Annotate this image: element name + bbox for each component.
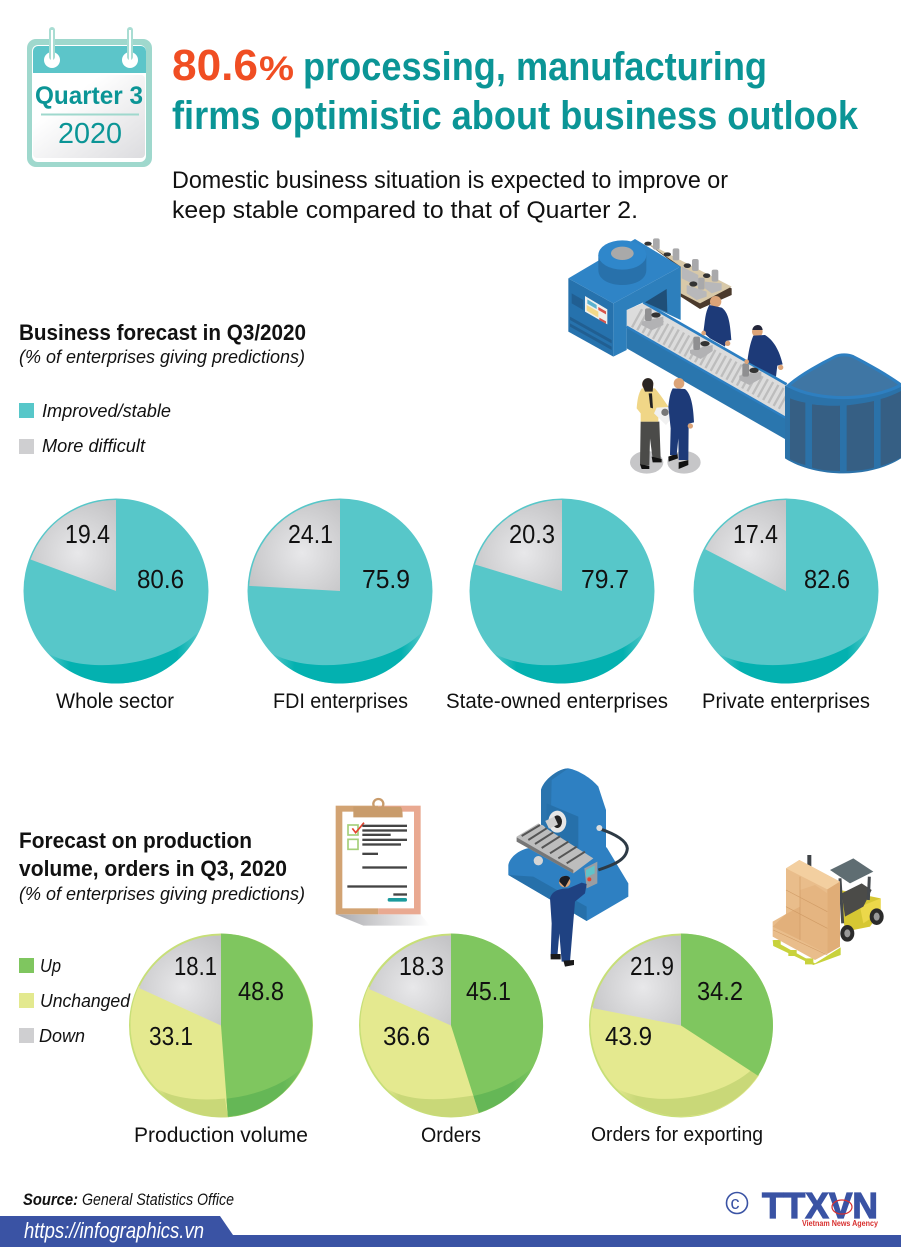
subtitle: [172, 167, 728, 224]
legend: business forecast: More difficult: [42, 436, 146, 456]
pie chart: production volume: 48.8: [238, 976, 284, 1006]
pie chart: orders: [359, 933, 543, 1147]
pie chart: private enterprises: Private enterprises: [702, 690, 870, 713]
pie chart: orders: 45.1: [466, 976, 511, 1006]
title: [172, 41, 859, 138]
source: [23, 1190, 234, 1209]
legend: business forecast: Improved/stable: [42, 401, 171, 421]
legend: business forecast: [19, 401, 171, 456]
pie chart: orders for exporting: 43.9: [605, 1021, 652, 1051]
icon: milling machine with operator: [508, 768, 628, 967]
pie chart: orders for exporting: [589, 934, 773, 1146]
pie chart: private enterprises: 17.4: [733, 519, 778, 549]
pie chart: private enterprises: [694, 498, 878, 713]
engineers discussing: [630, 378, 701, 474]
machine housing: [568, 239, 681, 357]
note: unit of measure: (% of enterprises giving predictions): [19, 884, 305, 904]
icon: calendar Quarter 3 2020: [27, 27, 152, 167]
pie chart: whole sector: 19.4: [65, 519, 110, 549]
note: unit of measure: (% of enterprises giving predictions): [19, 347, 305, 367]
pie chart: state-owned enterprises: 20.3: [509, 519, 555, 549]
heading: production forecast: [19, 828, 287, 881]
pie chart: production volume: 18.1: [174, 951, 217, 981]
pie chart: whole sector: 80.6: [137, 564, 184, 594]
pie chart: orders for exporting: Orders for exporting: [591, 1124, 763, 1146]
title: 80.6: [172, 41, 258, 90]
pie chart: orders: Orders: [421, 1124, 481, 1147]
pie chart: private enterprises: 82.6: [804, 564, 850, 594]
pie chart: orders: 18.3: [399, 951, 444, 981]
icon: forklift with boxes: [773, 855, 884, 965]
pie chart: state-owned enterprises: 79.7: [581, 564, 629, 594]
legend: production forecast: Up: [40, 956, 61, 976]
pie chart: whole sector: [24, 498, 208, 713]
footer banner: https://infographics.vn: [24, 1218, 204, 1243]
subtitle: Domestic business situation is expected to improve or: [172, 167, 728, 194]
conveyor belt: [627, 302, 787, 440]
pie chart: FDI enterprises: 75.9: [362, 564, 410, 594]
parts tray: [644, 238, 732, 309]
pie chart: production volume: 33.1: [149, 1021, 193, 1051]
illustration: factory conveyor with workers: [568, 238, 901, 474]
logo: TTXVN: TTXVN: [762, 1185, 878, 1226]
icon: clipboard checklist: [336, 799, 430, 926]
title: %: [259, 50, 294, 88]
hopper: [785, 355, 901, 473]
pie chart: whole sector: Whole sector: [56, 690, 174, 713]
worker: right at conveyor: [744, 325, 783, 377]
subtitle: keep stable compared to that of Quarter 2.: [172, 197, 638, 224]
pie chart: production volume: Production volume: [134, 1124, 308, 1147]
pie chart: orders: 36.6: [383, 1021, 430, 1051]
logo: TTXVN: c: [730, 1193, 740, 1213]
worker: left at conveyor: [701, 296, 731, 347]
footer banner: [0, 1216, 901, 1247]
pie chart: FDI enterprises: 24.1: [288, 519, 333, 549]
pie chart: state-owned enterprises: State-owned enterprises: [446, 690, 668, 713]
heading: production forecast: volume, orders in Q3, 2020: [19, 856, 287, 881]
icon: calendar Quarter 3 2020: Quarter 3: [35, 82, 143, 110]
legend: production forecast: Unchanged: [40, 991, 131, 1011]
heading: production forecast: Forecast on production: [19, 828, 252, 853]
source: General Statistics Office: [82, 1190, 234, 1209]
pie chart: production volume: [129, 934, 313, 1147]
title: processing, manufacturing: [303, 45, 767, 89]
pie chart: orders for exporting: 34.2: [697, 976, 743, 1006]
logo: TTXVN: Vietnam News Agency: [802, 1219, 878, 1228]
source: Source:: [23, 1190, 78, 1209]
pie chart: FDI enterprises: FDI enterprises: [273, 690, 408, 713]
pie chart: orders for exporting: 21.9: [630, 951, 674, 981]
legend: production forecast: [19, 956, 131, 1046]
pie chart: state-owned enterprises: [446, 498, 668, 713]
heading: business forecast: Business forecast in Q3/2020: [19, 320, 306, 345]
pie chart: FDI enterprises: [248, 498, 432, 713]
legend: production forecast: Down: [39, 1026, 85, 1046]
icon: calendar Quarter 3 2020: 2020: [58, 118, 122, 150]
